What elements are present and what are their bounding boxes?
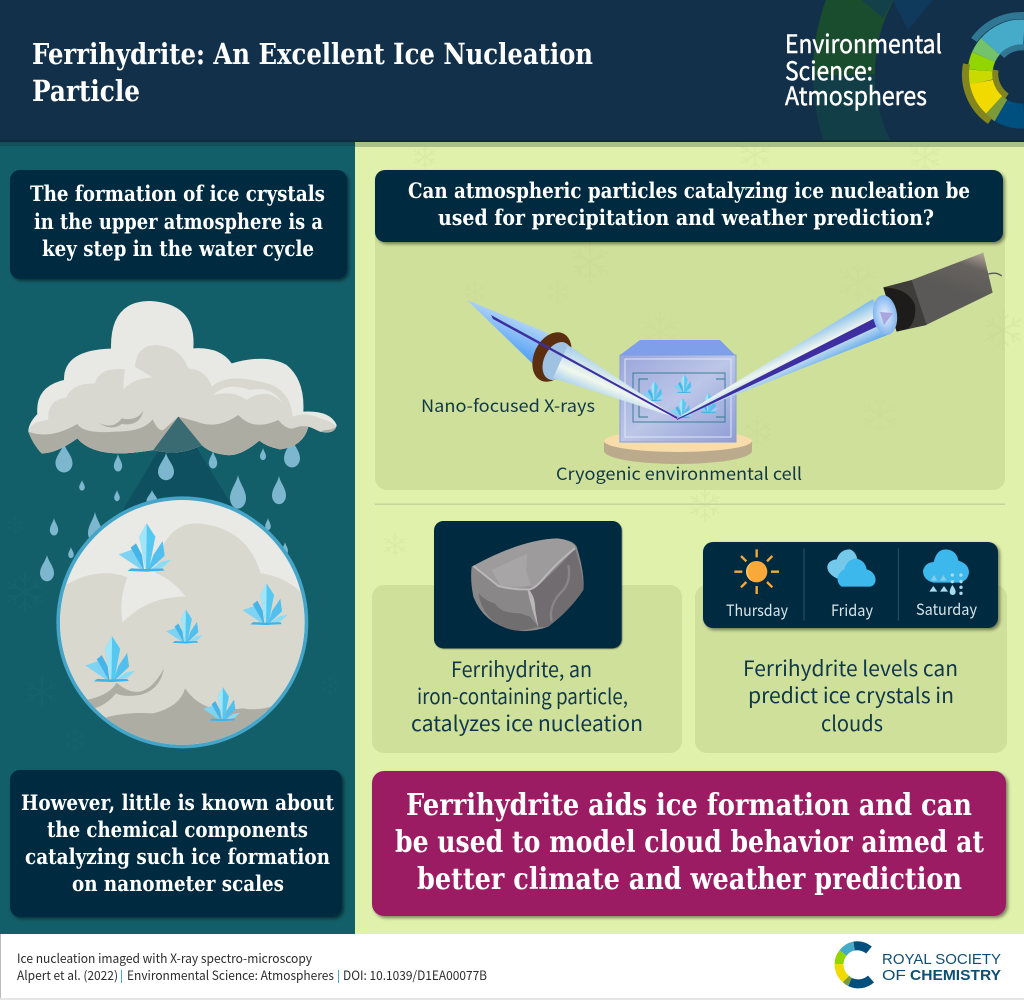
icon: ferrihydrite rock [434, 521, 622, 648]
callout: ice crystals intro: The formation of ice crystals [30, 181, 325, 206]
caption: ferrihydrite levels predict ice crystals: clouds [821, 708, 883, 738]
panel: right light green background [355, 142, 1024, 934]
panel: weather forecast [703, 542, 998, 628]
illustration: cloud [28, 301, 337, 455]
citation text: Environmental Science: Atmospheres [127, 965, 334, 984]
panel: ferrihydrite caption background [372, 585, 682, 753]
logo text: Royal Society of Chemistry: OF [882, 967, 906, 984]
illustration: cryogenic cell stage [604, 430, 752, 464]
callout: little is known: However, little is known about [21, 790, 334, 815]
callout: ice crystals intro: in the upper atmosphere is a [34, 209, 323, 234]
citation text: Alpert et al. (2022) [17, 965, 118, 984]
icon: snow and rain cloud [923, 549, 969, 595]
journal name: Science: [785, 52, 873, 88]
logo text: Royal Society of Chemistry: CHEMISTRY [910, 967, 1001, 984]
illustration: incident X-ray beam [467, 300, 548, 364]
icon: focusing lens ring [525, 326, 579, 388]
illustration: magnified shadow cone [55, 417, 305, 625]
caption: ferrihydrite catalyzes ice nucleation: iron-containing particle, [417, 681, 628, 711]
illustration: magnified cloud circle with ice crystals [53, 493, 313, 757]
caption: ferrihydrite catalyzes ice nucleation [411, 654, 643, 738]
panel: weather forecast: Thursday [726, 599, 788, 621]
callout: little is known: on nanometer scales [72, 871, 284, 896]
illustration: detector camera [883, 253, 1002, 332]
heading: research question [375, 170, 1003, 242]
label: cryogenic environmental cell: Cryogenic environmental cell [556, 460, 802, 485]
caption: ferrihydrite levels predict ice crystals: Ferrihydrite levels can [743, 653, 958, 683]
panel: weather forecast: Saturday [916, 598, 977, 620]
logo text: Royal Society of Chemistry: ROYAL SOCIETY [882, 951, 1001, 968]
panel: X-ray experiment background [375, 225, 1005, 490]
citation text [17, 948, 487, 984]
callout: ice crystals intro: key step in the water cycle [42, 236, 314, 261]
caption: ferrihydrite levels predict ice crystals [743, 653, 958, 738]
heading: research question: used for precipitation and weather prediction? [438, 205, 934, 230]
journal name: Environmental [785, 25, 942, 61]
journal name [785, 25, 942, 113]
illustration: rain drops [40, 438, 300, 581]
caption: ferrihydrite catalyzes ice nucleation: Ferrihydrite, an [451, 654, 592, 684]
title [32, 37, 593, 108]
citation text: DOI: 10.1039/D1EA00077B [343, 965, 487, 984]
illustration: cryogenic cell [620, 340, 736, 442]
callout: conclusion [372, 771, 1006, 916]
callout: ice crystals intro [10, 170, 347, 279]
footer [0, 934, 1024, 1000]
icon: sun [734, 549, 779, 594]
caption: ferrihydrite levels predict ice crystals: predict ice crystals in [748, 680, 954, 710]
journal name: Atmospheres [785, 77, 927, 113]
panel: weather forecast: Friday [831, 599, 873, 621]
citation text: Ice nucleation imaged with X-ray spectro-microscopy [17, 948, 312, 967]
panel: left teal background [0, 142, 355, 934]
header band [0, 0, 1024, 142]
title: Particle [32, 74, 140, 108]
title: Ferrihydrite: An Excellent Ice Nucleation [32, 37, 593, 71]
callout: little is known [10, 770, 342, 917]
icon: journal logo [965, 15, 1024, 121]
panel: prediction caption background [695, 585, 1007, 753]
callout: little is known: the chemical components [47, 817, 308, 842]
illustration: focused X-ray beam [491, 315, 677, 419]
icon: cloud [827, 549, 876, 587]
illustration: scattered X-ray beam [677, 294, 900, 420]
caption: ferrihydrite catalyzes ice nucleation: catalyzes ice nucleation [411, 708, 643, 738]
icon: Royal Society of Chemistry logo [839, 946, 871, 984]
callout: little is known: catalyzing such ice formation [25, 844, 330, 869]
label: nano-focused x-rays: Nano-focused X-rays [421, 392, 595, 417]
logo text: Royal Society of Chemistry [882, 951, 1001, 984]
